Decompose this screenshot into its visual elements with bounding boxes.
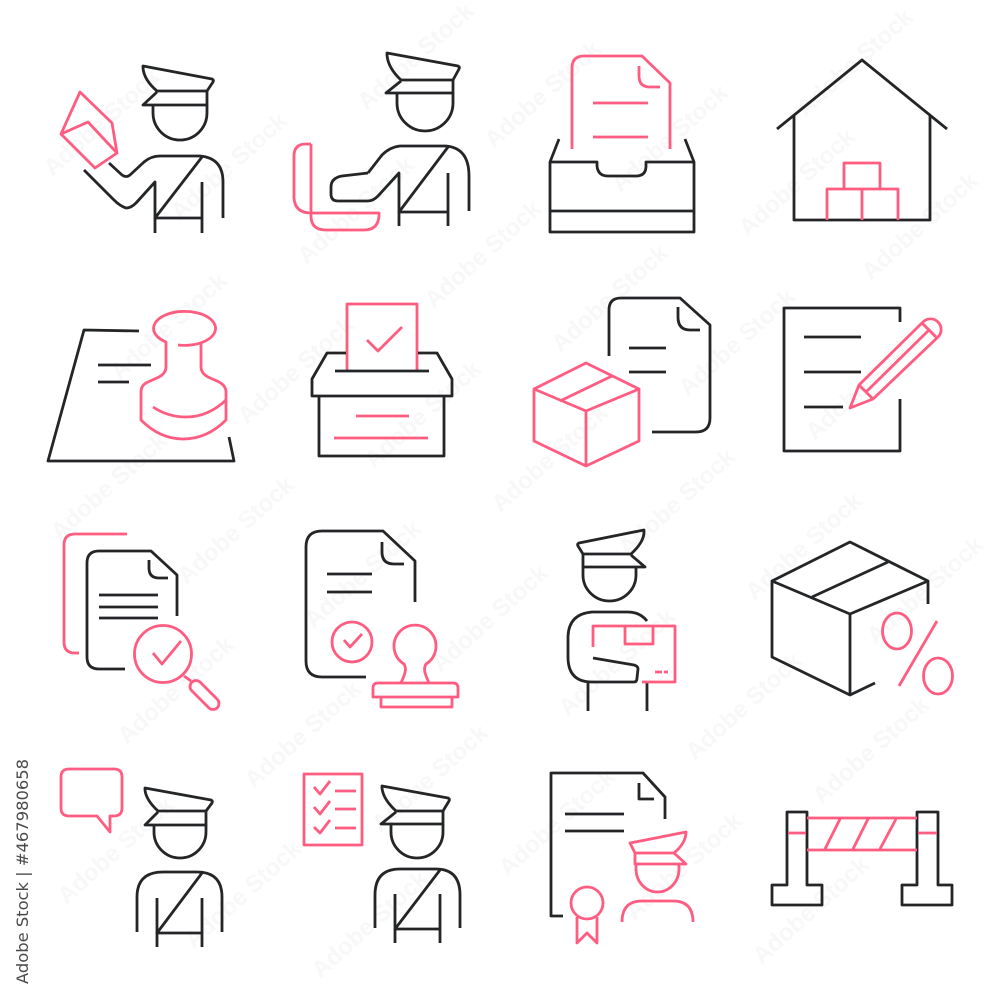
icon: officer carrying parcel bbox=[568, 530, 675, 711]
ribbon badge bbox=[571, 887, 603, 943]
approval seal bbox=[332, 622, 372, 662]
watermark: repeated stock text: Adobe Stock bbox=[426, 559, 554, 678]
icon: officer with checklist bbox=[304, 774, 460, 943]
watermark: repeated stock text: Adobe Stock bbox=[553, 603, 681, 722]
house bbox=[777, 60, 947, 220]
watermark: repeated stock text: Adobe Stock bbox=[366, 719, 494, 838]
officer head and cap bbox=[143, 66, 213, 140]
officer body bbox=[331, 146, 469, 226]
watermark: repeated stock text: Adobe Stock bbox=[299, 515, 427, 634]
watermark: repeated stock text: Adobe Stock bbox=[620, 807, 748, 926]
watermark: repeated stock text: Adobe Stock bbox=[493, 763, 621, 882]
watermark: repeated stock text: Adobe Stock bbox=[740, 487, 868, 606]
parcel bbox=[593, 626, 675, 682]
document bbox=[306, 531, 415, 677]
watermark: repeated stock text: Adobe Stock bbox=[38, 63, 166, 182]
watermark: repeated stock text: Adobe Stock bbox=[800, 327, 928, 446]
icon: form with pencil bbox=[784, 308, 941, 451]
icon: warehouse with boxes bbox=[777, 60, 947, 220]
parcel bbox=[534, 363, 639, 466]
boxes bbox=[827, 163, 898, 220]
speech bubble bbox=[61, 769, 122, 832]
watermark: repeated stock text: Adobe Stock bbox=[747, 851, 875, 970]
watermark: repeated stock text: Adobe Stock bbox=[359, 355, 487, 474]
percent sign bbox=[882, 613, 952, 694]
document bbox=[609, 298, 710, 432]
icon: striped barrier bbox=[772, 812, 952, 905]
pencil bbox=[850, 319, 941, 408]
barrier bar bbox=[788, 818, 937, 850]
watermark: repeated stock text: Adobe Stock bbox=[733, 123, 861, 242]
stamp bbox=[373, 625, 458, 707]
watermark: repeated stock text: Adobe Stock bbox=[165, 107, 293, 226]
icon: ballot box bbox=[312, 304, 452, 456]
officer body bbox=[375, 869, 460, 943]
posts bbox=[772, 812, 952, 905]
watermark: repeated stock text: Adobe Stock bbox=[292, 151, 420, 270]
icon: officer holding envelope bbox=[61, 66, 223, 233]
box label lines bbox=[334, 416, 428, 438]
watermark: repeated stock text: Adobe Stock bbox=[419, 195, 547, 314]
icon: officer at laptop bbox=[294, 53, 469, 230]
icon: document and parcel bbox=[534, 298, 710, 466]
document bbox=[87, 551, 177, 669]
watermark: repeated stock text: Adobe Stock bbox=[52, 791, 180, 910]
icon: certificate with officer bbox=[551, 773, 693, 943]
envelope bbox=[61, 92, 117, 168]
watermark: repeated stock text: Adobe Stock bbox=[606, 79, 734, 198]
watermark: repeated stock text: Adobe Stock bbox=[45, 427, 173, 546]
watermark: repeated stock text: Adobe Stock bbox=[105, 267, 233, 386]
watermark: repeated stock text: Adobe Stock bbox=[861, 531, 989, 650]
paper bbox=[48, 330, 234, 461]
side credit text: Adobe Stock | #467980658 bbox=[13, 759, 32, 984]
ballot slip bbox=[347, 304, 417, 371]
watermark: repeated stock text: Adobe Stock bbox=[613, 443, 741, 562]
officer head and cap bbox=[578, 530, 645, 601]
watermark: repeated stock text: Adobe Stock bbox=[306, 865, 434, 984]
officer bbox=[622, 832, 693, 922]
watermark: repeated stock text: Adobe Stock bbox=[352, 0, 480, 116]
officer body bbox=[84, 156, 223, 233]
officer head and cap bbox=[145, 788, 212, 858]
icon: parcel with percent sign bbox=[772, 542, 952, 695]
watermark: repeated stock text: Adobe Stock bbox=[680, 647, 808, 766]
watermark: repeated stock text: Adobe Stock bbox=[807, 691, 935, 810]
tray bbox=[550, 139, 694, 232]
officer head and cap bbox=[381, 786, 449, 858]
document bbox=[572, 56, 670, 149]
watermark: repeated stock text: Adobe Stock bbox=[112, 631, 240, 750]
watermark: repeated stock text: Adobe Stock bbox=[673, 283, 801, 402]
icon: officer with speech bubble bbox=[61, 769, 222, 947]
watermark: repeated stock text: Adobe Stock bbox=[479, 35, 607, 154]
watermark: repeated stock text: Adobe Stock bbox=[172, 471, 300, 590]
box bbox=[312, 353, 452, 456]
officer body bbox=[137, 872, 222, 947]
watermark: repeated stock text: Adobe Stock bbox=[232, 311, 360, 430]
magnifier bbox=[134, 626, 221, 712]
icon: document inspection with magnifier bbox=[64, 534, 221, 712]
watermark: repeated stock text: Adobe Stock bbox=[856, 167, 984, 286]
laptop bbox=[294, 144, 379, 230]
form bbox=[784, 308, 900, 451]
icon: approved document with stamp bbox=[306, 531, 458, 707]
watermark: repeated stock text: Adobe Stock bbox=[239, 675, 367, 794]
parcel bbox=[772, 542, 928, 695]
officer head and cap bbox=[386, 53, 459, 131]
icon: stamp on paper bbox=[48, 311, 234, 461]
officer body bbox=[568, 612, 647, 711]
watermark: repeated stock text: Adobe Stock bbox=[179, 835, 307, 954]
watermark: repeated stock text: Adobe Stock bbox=[486, 399, 614, 518]
icon: document in inbox tray bbox=[550, 56, 694, 232]
watermark: repeated stock text: Adobe Stock bbox=[546, 239, 674, 358]
stamp bbox=[141, 311, 226, 439]
back sheet bbox=[64, 534, 127, 653]
checklist bbox=[304, 774, 362, 845]
certificate bbox=[551, 773, 665, 916]
watermark: repeated stock text: Adobe Stock bbox=[791, 3, 919, 122]
